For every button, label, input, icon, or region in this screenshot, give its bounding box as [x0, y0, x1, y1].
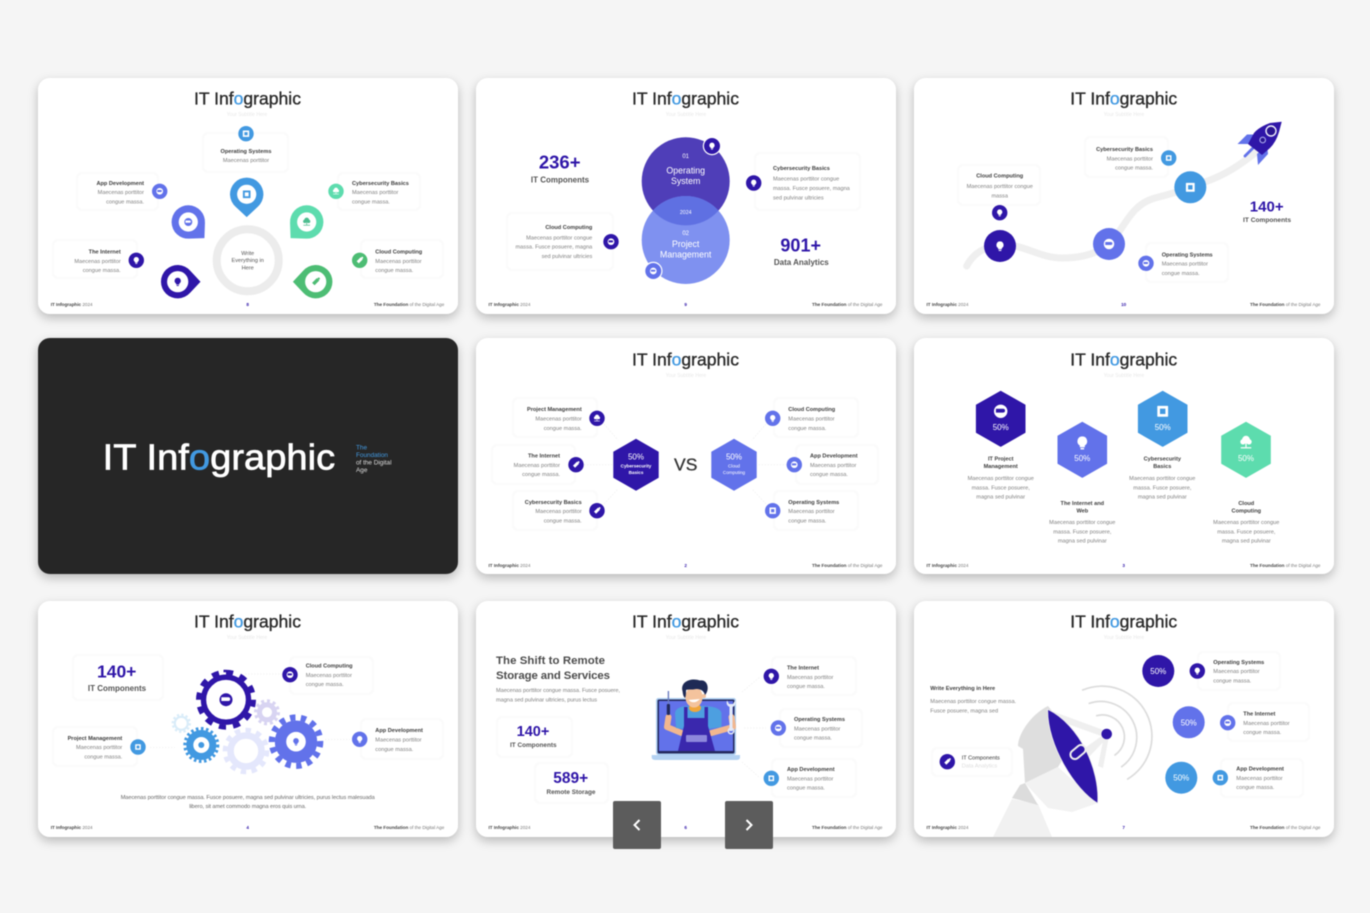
item: The Internet: congue massa. [787, 684, 825, 690]
road path [967, 153, 1255, 266]
item: Operating Systems: Operating Systems [221, 149, 271, 155]
footer: The Foundation of the Digital Age [1250, 563, 1321, 568]
item: Operating Systems: congue massa. [1162, 271, 1200, 277]
item: The Internet: congue massa. [1243, 730, 1282, 736]
item: Cloud Computing: congue massa. [306, 682, 344, 688]
item: App Development [352, 719, 443, 759]
title: IT Infographic [194, 88, 301, 108]
step: Cloud Computing [1213, 422, 1279, 545]
stat: 140+: 140+ [97, 661, 136, 681]
venn diagram [642, 137, 730, 284]
item: Cybersecurity Basics: Maecenas porttitor [1107, 156, 1153, 162]
footer: IT Infographic 2024 [926, 302, 969, 307]
panel: dark cover slide [38, 338, 458, 574]
item: Operating Systems: congue massa. [788, 518, 827, 524]
panel: remote storage slide [476, 601, 896, 837]
hexagon: cybersecurity [613, 439, 659, 491]
gear: lavender small [256, 701, 278, 724]
body text: Maecenas porttitor congue massa. Fusce posuere, [496, 688, 620, 694]
item: Project Management: Project Management [68, 736, 122, 742]
gear: periwinkle [272, 718, 320, 766]
item: The Internet: The Internet [528, 454, 560, 460]
illustration: satellite dish [993, 686, 1152, 837]
step: Cloud Computing: Maecenas porttitor congue [1213, 520, 1279, 526]
item: Operating Systems [771, 709, 862, 747]
venn diagram: Management [660, 250, 712, 260]
item: Cybersecurity Basics [1085, 137, 1176, 177]
panel: rocket roadmap slide [914, 78, 1334, 314]
body text: magna sed pulvinar ultricies, purus lectus [496, 697, 597, 703]
venn diagram: System [671, 176, 700, 186]
step: Cloud Computing: Cloud [1238, 501, 1255, 507]
item: Project Management [513, 398, 605, 437]
cover tagline: of the Digital [356, 459, 392, 466]
step: The Internet and Web: Maecenas porttitor congue [1049, 520, 1115, 526]
item: App Development: App Development [1236, 767, 1284, 773]
body text: Fusce posuere, magna sed [930, 708, 998, 714]
pin: navy left [161, 265, 200, 298]
centre ring: Here [242, 266, 254, 272]
item: The Internet [492, 445, 584, 484]
description text [121, 795, 376, 810]
item: App Development: congue massa. [787, 786, 825, 792]
stat: 140+: IT Components [510, 742, 557, 749]
marker: periwinkle stop [1093, 228, 1125, 260]
item: Cloud Computing: Maecenas porttitor congue [526, 235, 592, 241]
step: Cloud Computing: Computing [1232, 508, 1262, 514]
gear: navy [198, 672, 254, 727]
item: Operating Systems: congue massa. [1213, 678, 1252, 684]
hexagon: cybersecurity: 50% [628, 453, 644, 462]
footer: 9 [684, 302, 687, 307]
gear: lavender large [225, 730, 267, 772]
cover title: IT Infographic [103, 436, 335, 478]
item: Cloud Computing [282, 657, 373, 694]
metric: 50% periwinkle: 50% [1181, 718, 1197, 727]
footer: The Foundation of the Digital Age [812, 302, 883, 307]
item: Cybersecurity Basics: congue massa. [352, 199, 390, 205]
subtitle: Your Subtitle Here [1104, 112, 1144, 118]
body text [496, 688, 620, 703]
stat: 140+: 140+ [517, 724, 549, 740]
item: Cloud Computing [507, 213, 619, 270]
item: The Internet: The Internet [787, 666, 819, 672]
item: The Internet: The Internet [89, 250, 121, 256]
hexagon: cloud [711, 439, 757, 491]
item: App Development: Maecenas porttitor [1236, 776, 1283, 782]
item: Cloud Computing [765, 398, 858, 437]
item: Cloud Computing: congue massa. [375, 268, 414, 274]
footer: 7 [1122, 825, 1125, 830]
stat: 901+: Data Analytics [774, 258, 829, 267]
item: The Internet [764, 657, 856, 695]
item: Operating Systems [1190, 652, 1280, 690]
footer: IT Infographic 2024 [51, 825, 93, 830]
item: Cybersecurity Basics [513, 491, 605, 530]
item: Cybersecurity Basics: congue massa. [544, 518, 582, 524]
item: Cloud Computing: massa [991, 193, 1009, 199]
footer: IT Infographic 2024 [926, 825, 969, 830]
item: Operating Systems [1138, 243, 1228, 282]
step: IT Project Management: IT Project [988, 457, 1014, 463]
item: Cloud Computing: sed pulvinar ultricies [542, 254, 592, 260]
subtitle: Your Subtitle Here [1104, 373, 1144, 379]
heading: Storage and Services [496, 670, 610, 682]
stat: 236+ [531, 152, 590, 184]
item: Operating Systems: Maecenas porttitor [788, 509, 835, 515]
item: Project Management: congue massa. [544, 426, 582, 432]
item: Cybersecurity Basics: Cybersecurity Basics [525, 500, 582, 506]
footer: The Foundation of the Digital Age [374, 825, 445, 830]
item: The Internet: Maecenas porttitor [514, 463, 560, 469]
illustration: repair technician in laptop [652, 679, 740, 760]
step: Cybersecurity Basics: magna sed pulvinar [1138, 495, 1187, 501]
footer [488, 563, 883, 568]
VS label: VS [674, 455, 697, 475]
item: App Development: App Development [375, 728, 423, 734]
title: IT Infographic [632, 612, 739, 632]
footer: 2 [684, 563, 687, 568]
footer: IT Infographic 2024 [488, 563, 531, 568]
item: App Development: App Development [787, 767, 835, 773]
item: Cybersecurity Basics: Maecenas porttitor [352, 190, 398, 196]
stat: 140+ [73, 655, 163, 700]
item: Cloud Computing: Maecenas porttitor [375, 259, 422, 265]
description text: libero, sit amet commodo magna eros quis urna. [189, 804, 307, 810]
item: App Development: Maecenas porttitor [375, 738, 422, 744]
subtitle: Your Subtitle Here [666, 373, 706, 379]
footer [51, 302, 445, 307]
hexagon: cybersecurity: Cybersecurity [621, 463, 652, 468]
footer [488, 302, 883, 307]
item: IT Components: IT Components [962, 756, 1000, 762]
item: App Development: App Development [96, 181, 144, 187]
step: IT Project Management: Management [984, 464, 1018, 470]
item: Project Management: Project Management [527, 407, 582, 413]
item: Cloud Computing [958, 165, 1040, 220]
stat: 901+ [774, 236, 829, 267]
stat: 589+: Remote Storage [546, 789, 596, 796]
item: App Development: App Development [810, 454, 858, 460]
heading [496, 655, 610, 682]
footer: 8 [246, 302, 249, 307]
pin: green right [293, 265, 332, 298]
panel: gears slide [38, 601, 458, 837]
item: Operating Systems: Operating Systems [794, 717, 845, 723]
metric: 50% periwinkle [1173, 706, 1205, 738]
item: The Internet: The Internet [1243, 712, 1275, 718]
gear: pale blue small [173, 715, 190, 732]
footer: IT Infographic 2024 [488, 302, 531, 307]
item: The Internet: Maecenas porttitor [787, 675, 833, 681]
stat: 140+: IT Components [88, 684, 147, 693]
title: IT Infographic [1070, 612, 1177, 632]
item: Cybersecurity Basics: congue massa. [1115, 166, 1153, 172]
panel: versus slide [476, 338, 896, 574]
step: Cloud Computing: magna sed pulvinar [1222, 539, 1271, 545]
title: IT Infographic [632, 350, 739, 370]
metric: 50% navy: 50% [1150, 667, 1166, 676]
item: Cybersecurity Basics: Cybersecurity Basics [352, 181, 409, 187]
item: The Internet: congue massa. [83, 268, 121, 274]
item: App Development: Maecenas porttitor [787, 776, 833, 782]
button: next [725, 801, 773, 849]
metric: 50% blue [1165, 762, 1197, 794]
item: The Internet: Maecenas porttitor [1243, 721, 1290, 727]
metric: 50% navy [1142, 655, 1174, 687]
pin: blue top [230, 178, 263, 217]
title: IT Infographic [1070, 350, 1177, 370]
centre ring: Everything in [232, 258, 264, 264]
subtitle: Your Subtitle Here [227, 635, 267, 641]
heading: Write Everything in Here [930, 686, 995, 692]
footer: IT Infographic 2024 [51, 302, 93, 307]
item: The Internet [1220, 703, 1309, 741]
metric: 50% blue: 50% [1173, 774, 1189, 783]
panel: hexagon steps slide [914, 338, 1334, 574]
step: The Internet and Web: Web [1076, 508, 1089, 514]
body text: Maecenas porttitor congue massa. [930, 699, 1017, 705]
item: Cloud Computing: Cloud Computing [976, 174, 1024, 180]
stat: 236+: IT Components [531, 176, 590, 184]
item: Cloud Computing: Cloud Computing [375, 250, 423, 256]
item: IT Components: Data Analytics [962, 764, 997, 770]
item: The Internet [53, 240, 144, 278]
footer: The Foundation of the Digital Age [812, 825, 883, 830]
venn diagram: Operating [666, 166, 705, 176]
footer: The Foundation of the Digital Age [812, 563, 883, 568]
venn diagram: 2024 [680, 210, 692, 216]
step: Cybersecurity Basics: Cybersecurity [1144, 457, 1182, 463]
item: App Development: Maecenas porttitor [810, 463, 856, 469]
subtitle: Your Subtitle Here [227, 112, 267, 118]
stat: 589+ [535, 763, 608, 803]
panel: radial pins slide [38, 78, 458, 314]
item: Cloud Computing [352, 240, 443, 278]
footer: 3 [1122, 563, 1125, 568]
footer: 4 [246, 825, 249, 830]
item: App Development: congue massa. [810, 472, 848, 478]
panel: satellite dish slide [914, 601, 1334, 837]
stat: 140+ [1243, 199, 1291, 224]
venn diagram: 02 [682, 231, 690, 237]
cover tagline: Foundation [356, 452, 388, 459]
item: App Development: congue massa. [375, 747, 414, 753]
item: Cloud Computing: Cloud Computing [306, 664, 353, 670]
stat: 140+ [497, 717, 572, 757]
item: Operating Systems: Maecenas porttitor [1213, 669, 1260, 675]
subtitle: Your Subtitle Here [666, 112, 706, 118]
venn diagram: Project [672, 239, 700, 249]
item: Project Management [53, 727, 146, 766]
footer: The Foundation of the Digital Age [1250, 825, 1321, 830]
step: Cybersecurity Basics: 50% [1155, 423, 1171, 432]
cover tagline: Age [356, 467, 368, 474]
item: IT Components [932, 748, 1012, 776]
footer: 10 [1121, 302, 1127, 307]
item: App Development: Maecenas porttitor [98, 190, 144, 196]
step: IT Project Management: massa. Fusce posuere, [972, 485, 1030, 491]
panel: venn slide [476, 78, 896, 314]
item: The Internet: Maecenas porttitor [74, 259, 121, 265]
footer [926, 825, 1321, 830]
item: Cybersecurity Basics: Cybersecurity Basics [1096, 147, 1153, 153]
item: App Development [77, 173, 167, 210]
item: Operating Systems: congue massa. [794, 736, 832, 742]
item: Operating Systems [765, 491, 858, 530]
step: The Internet and Web: 50% [1074, 454, 1090, 463]
footer: 6 [684, 825, 687, 830]
icon: rocket [1238, 122, 1282, 165]
item: Operating Systems: Maecenas porttitor [223, 158, 269, 164]
item: Cybersecurity Basics: sed pulvinar ultricies [773, 195, 824, 201]
step: Cloud Computing: massa. Fusce posuere, [1217, 529, 1276, 535]
item: App Development [787, 445, 878, 484]
item: Operating Systems [203, 126, 288, 172]
stat: 140+: IT Components [1243, 217, 1291, 224]
step: The Internet and Web: magna sed pulvinar [1058, 539, 1107, 545]
item: Cloud Computing: Cloud Computing [545, 225, 593, 231]
item: Operating Systems: Operating Systems [788, 500, 839, 506]
marker: blue stop [1174, 171, 1206, 203]
item: Project Management: Maecenas porttitor [535, 416, 582, 422]
item: Operating Systems: Maecenas porttitor [1162, 262, 1208, 268]
item: Cybersecurity Basics: massa. Fusce posuere, magna [773, 186, 851, 192]
gear: blue [185, 729, 218, 761]
venn diagram: 01 [682, 154, 690, 160]
item: Cloud Computing: congue massa. [788, 426, 827, 432]
hexagon: cybersecurity: Basics [629, 470, 644, 475]
heading: The Shift to Remote [496, 655, 605, 667]
stat: 236+: 236+ [539, 152, 581, 172]
footer: The Foundation of the Digital Age [1250, 302, 1321, 307]
item: Cloud Computing: Cloud Computing [788, 407, 836, 413]
stat: 901+: 901+ [780, 236, 821, 256]
footer [51, 825, 445, 830]
item: Operating Systems: Operating Systems [1162, 252, 1213, 258]
marker: navy stop [984, 230, 1016, 262]
footer [926, 563, 1321, 568]
item: Project Management: Maecenas porttitor [76, 745, 122, 751]
centre ring [217, 229, 279, 291]
step: IT Project Management: magna sed pulvinar [976, 495, 1025, 501]
step: IT Project Management: 50% [993, 423, 1009, 432]
step: Cloud Computing: 50% [1238, 454, 1254, 463]
pin: periwinkle left [165, 198, 216, 250]
item: Cybersecurity Basics: Maecenas porttitor [535, 509, 582, 515]
step: Cybersecurity Basics: Basics [1153, 464, 1171, 470]
centre ring: Write [241, 251, 254, 257]
item: Cloud Computing: Maecenas porttitor congue [967, 184, 1033, 190]
step: IT Project Management [968, 391, 1034, 501]
hexagon: cloud: 50% [726, 453, 742, 462]
footer [488, 825, 883, 830]
title: IT Infographic [1070, 88, 1177, 108]
item: App Development: congue massa. [1236, 785, 1275, 791]
stat: 140+: 140+ [1250, 199, 1284, 216]
stat: 589+: 589+ [553, 770, 588, 787]
cover tagline: The [356, 444, 367, 452]
item: Operating Systems: Maecenas porttitor [794, 726, 840, 732]
item: App Development [1213, 759, 1303, 797]
item: Cloud Computing: massa. Fusce posuere, magna [516, 245, 593, 251]
subtitle: Your Subtitle Here [1104, 635, 1144, 641]
item: Cybersecurity Basics: Maecenas porttitor congue [773, 177, 839, 183]
footer [926, 302, 1321, 307]
step: The Internet and Web: massa. Fusce posuere, [1053, 529, 1112, 535]
step: Cybersecurity Basics [1129, 391, 1195, 501]
subtitle: Your Subtitle Here [666, 635, 706, 641]
step: The Internet and Web: The Internet and [1061, 501, 1105, 507]
step: The Internet and Web [1049, 422, 1115, 545]
cover tagline [356, 444, 392, 474]
hexagon: cloud: Computing [723, 470, 746, 475]
item: App Development: congue massa. [106, 199, 144, 205]
item: Operating Systems: Operating Systems [1213, 660, 1264, 666]
title: IT Infographic [632, 88, 739, 108]
body text [930, 699, 1017, 714]
footer: The Foundation of the Digital Age [374, 302, 445, 307]
button: previous [613, 801, 661, 849]
item: Project Management: congue massa. [84, 754, 123, 760]
item: Cloud Computing: Maecenas porttitor [306, 673, 352, 679]
description text: Maecenas porttitor congue massa. Fusce posuere, magna sed pulvinar ultricies, purus lectus malesuada [121, 795, 376, 801]
hexagon: cloud: Cloud [728, 463, 740, 468]
item: The Internet: congue massa. [522, 472, 560, 478]
step: Cybersecurity Basics: massa. Fusce posuere, [1133, 485, 1192, 491]
title: IT Infographic [194, 612, 301, 632]
item: Cybersecurity Basics: Cybersecurity Basics [773, 166, 830, 172]
footer: IT Infographic 2024 [488, 825, 531, 830]
item: Cloud Computing: Maecenas porttitor [788, 416, 835, 422]
step: IT Project Management: Maecenas porttitor congue [968, 476, 1034, 482]
step: Cybersecurity Basics: Maecenas porttitor congue [1129, 476, 1195, 482]
footer: IT Infographic 2024 [926, 563, 969, 568]
item: App Development [764, 759, 856, 797]
pin: mint right [279, 198, 330, 250]
item: Cybersecurity Basics [328, 173, 420, 210]
item: Cybersecurity Basics [746, 153, 860, 210]
